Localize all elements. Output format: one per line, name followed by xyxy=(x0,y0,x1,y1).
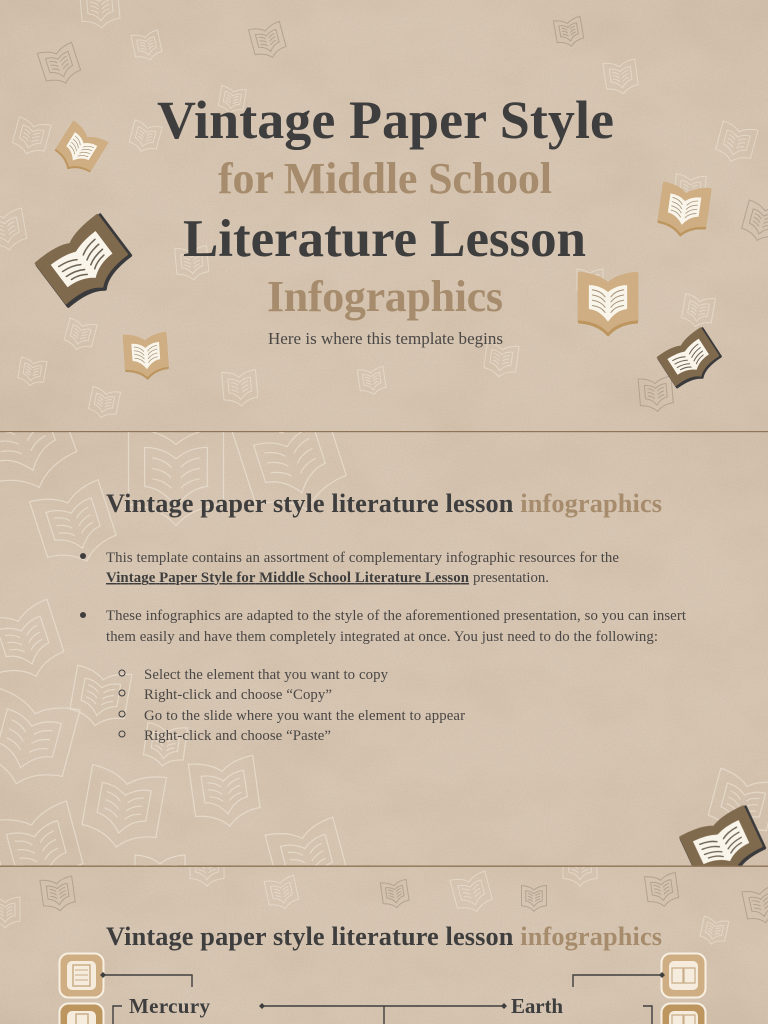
icon: dark book small right xyxy=(657,327,725,392)
icon: lower-left page xyxy=(60,1004,104,1024)
outlined book pattern, diagram xyxy=(0,867,768,944)
subtitle: Here is where this template begins xyxy=(268,329,503,348)
sub-list steps: Go to the slide where you want the element to appear xyxy=(144,708,465,724)
sub-list steps: Right-click and choose “Copy” xyxy=(144,687,332,703)
icon: top-left page xyxy=(60,954,104,998)
icon: dark book large xyxy=(35,214,138,313)
heading: Vintage paper style literature lesson infographics xyxy=(106,922,662,951)
label: Mercury: Mercury xyxy=(129,994,210,1018)
icon: tan book small left xyxy=(54,120,108,172)
heading: Vintage paper style literature lesson infographics xyxy=(106,489,662,518)
label: Earth: Earth xyxy=(511,994,563,1018)
bullet 1: presentation. xyxy=(473,570,549,586)
icon: top-right open book xyxy=(662,954,706,998)
icon: tan book lower left xyxy=(124,333,169,380)
title xyxy=(157,90,614,321)
slide 3: diagram xyxy=(0,851,768,1024)
outlined book pattern, cover xyxy=(0,0,768,420)
title: for Middle School xyxy=(218,154,552,203)
sub-list steps: Select the element that you want to copy xyxy=(144,667,389,683)
title: Vintage Paper Style xyxy=(157,90,614,150)
title: Infographics xyxy=(267,272,503,321)
bullet 1: Vintage Paper Style for Middle School Literature Lesson xyxy=(106,570,469,586)
title: Literature Lesson xyxy=(183,210,586,268)
bullet 2: them easily and have them completely integrated at once. You just need to do the following: xyxy=(106,629,658,645)
icon: lower-right open book xyxy=(662,1004,706,1024)
icon: tan book centre right xyxy=(579,273,637,335)
bullet 2 xyxy=(80,608,687,645)
sub-list steps xyxy=(119,667,465,744)
slide divider top xyxy=(0,431,768,432)
sub-list steps: Right-click and choose “Paste” xyxy=(144,728,331,744)
icon: dark book bottom right xyxy=(679,805,766,866)
bullet 2: These infographics are adapted to the style of the aforementioned presentation, so you can insert xyxy=(106,608,687,624)
slide 2: instructions xyxy=(0,432,768,866)
bullet 1: This template contains an assortment of complementary infographic resources for the xyxy=(106,550,619,566)
outlined book pattern, instructions xyxy=(0,432,768,866)
slide divider bottom xyxy=(0,866,768,867)
slide 1: cover xyxy=(0,0,768,420)
connector lines xyxy=(100,972,665,1024)
bullet 1 xyxy=(80,550,619,586)
icon: tan book upper right xyxy=(657,182,711,239)
